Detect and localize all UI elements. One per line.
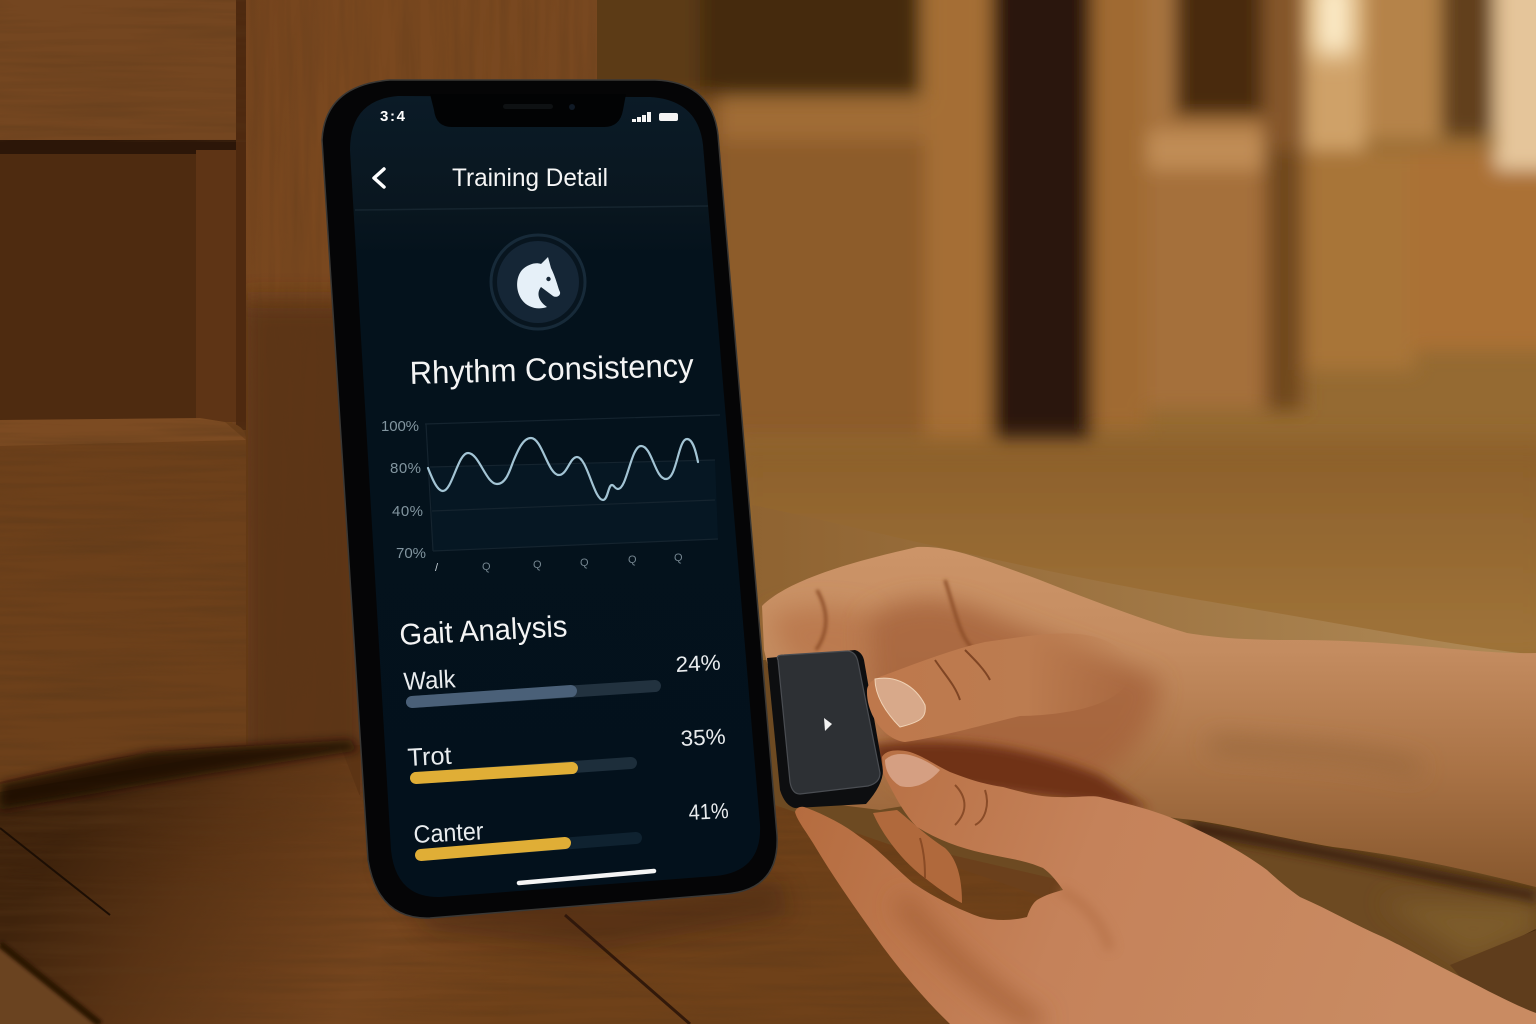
x-axis labels: Q: [674, 552, 683, 564]
y-axis labels: 70%: [396, 545, 426, 562]
y-axis labels: [381, 418, 426, 562]
x-axis labels: /: [435, 562, 439, 574]
icon: play triangle: [824, 718, 832, 731]
speaker and camera: [503, 104, 575, 110]
y-axis labels: 80%: [390, 460, 421, 477]
x-axis labels: [435, 552, 683, 574]
gait row: trot: 35%: [680, 724, 726, 751]
lower hand: [795, 750, 1536, 1024]
upper hand: [762, 547, 1536, 887]
icon: horse badge: [491, 235, 585, 329]
x-axis labels: Q: [482, 561, 491, 573]
notch: [430, 94, 626, 127]
x-axis labels: Q: [628, 554, 637, 566]
background: blurred stable: [560, 0, 1536, 660]
x-axis labels: Q: [533, 559, 542, 571]
rhythm trend line: [428, 438, 698, 500]
status time: 3:4: [380, 108, 406, 125]
gait row: trot: Trot: [407, 742, 452, 772]
gait row: canter: 41%: [688, 798, 729, 825]
x-axis labels: Q: [580, 557, 589, 569]
heading: rhythm consistency: Rhythm Consistency: [409, 347, 694, 391]
index fingernail: [885, 754, 940, 787]
gait row: walk: [403, 650, 721, 702]
y-axis labels: 100%: [381, 418, 419, 435]
phone screen: [350, 96, 760, 897]
screen title: Training Detail: [452, 164, 608, 192]
gait row: walk: Walk: [403, 665, 457, 696]
gait row: walk: 24%: [675, 650, 721, 677]
home indicator: [519, 871, 654, 883]
sensor device: [767, 650, 883, 808]
wooden table top surface: [752, 505, 1536, 1024]
back finger of lower hand: [873, 810, 962, 903]
heading: gait analysis: Gait Analysis: [399, 610, 568, 652]
back chevron: [374, 169, 384, 187]
upper thumb: [867, 633, 1131, 742]
y-axis labels: 40%: [392, 503, 423, 520]
thumbnail: [875, 678, 925, 727]
line chart: [381, 415, 720, 574]
gait row: canter: Canter: [413, 817, 484, 849]
wooden table front: [0, 740, 1110, 1024]
gait row: trot: [407, 724, 726, 778]
wooden post and panels on left: [0, 0, 597, 800]
phone body: [322, 80, 777, 918]
status icons: [632, 112, 678, 122]
phone: [322, 80, 777, 918]
gait row: canter: [413, 798, 729, 855]
